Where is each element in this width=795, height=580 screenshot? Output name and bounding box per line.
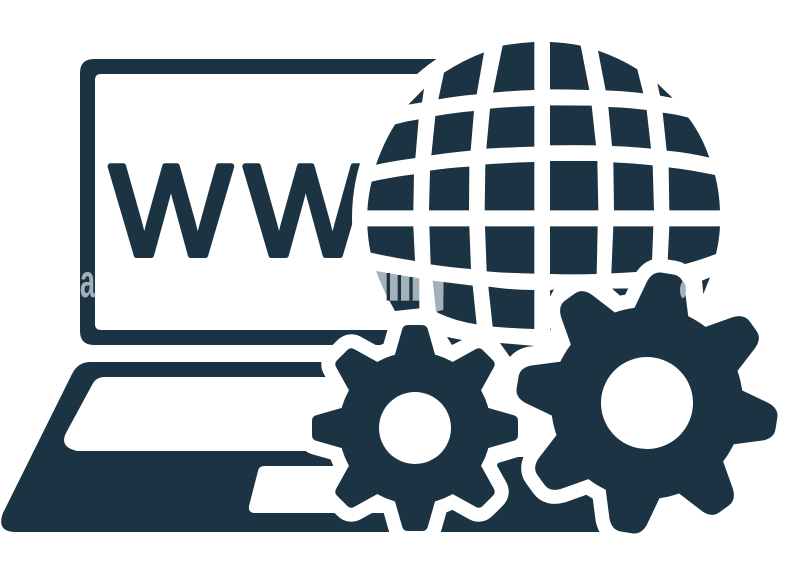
gear large	[497, 253, 795, 553]
globe knockout halo	[352, 26, 736, 410]
gear small	[312, 325, 518, 531]
laptop trackpad	[249, 466, 400, 513]
globe grid	[367, 42, 720, 357]
gear small halo	[312, 325, 518, 531]
laptop screen frame	[80, 59, 600, 345]
watermark letter left: a	[80, 255, 96, 308]
gear large halo	[497, 253, 795, 553]
www text on screen: WWW	[110, 139, 514, 283]
laptop base	[1, 362, 625, 532]
watermark remnant on large gear	[680, 282, 686, 298]
